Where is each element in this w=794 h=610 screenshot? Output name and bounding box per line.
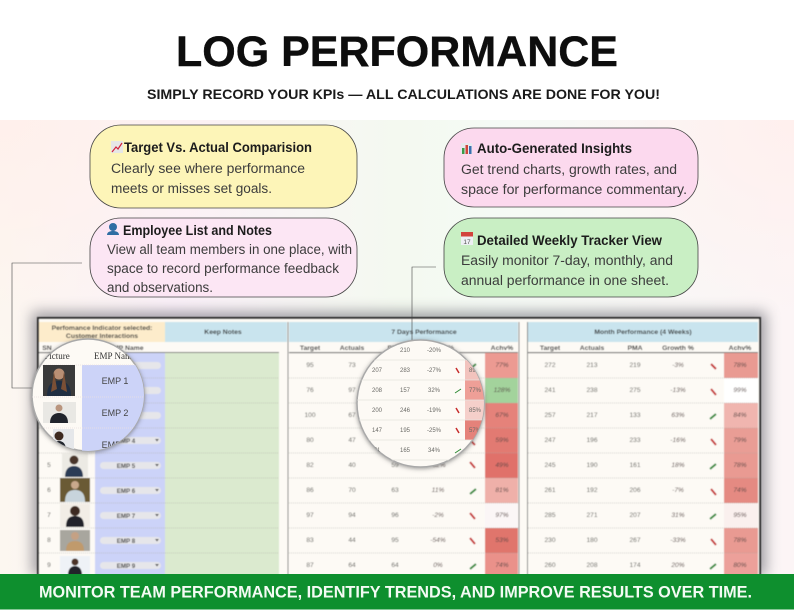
- employee and notes columns: [95, 353, 279, 575]
- card text: Get trend charts, growth rates, and: [461, 162, 677, 177]
- seven day table values: 80: [306, 437, 314, 444]
- month table values: 79%: [733, 437, 747, 444]
- employee rows: 6: [47, 487, 51, 494]
- month table values: 84%: [733, 412, 747, 419]
- employee rows: 7: [47, 512, 51, 519]
- magnifier: growth values: 165: [400, 448, 411, 454]
- seven day table values: 97: [306, 512, 314, 519]
- seven day table values: 95: [391, 537, 399, 544]
- magnifier: growth values: [356, 340, 486, 467]
- month table values: 208: [586, 562, 598, 569]
- card text: space for performance commentary.: [461, 182, 687, 197]
- month table values: 95%: [733, 512, 747, 519]
- card heading: Target Vs. Actual Comparision: [124, 140, 312, 155]
- month table values: 261: [544, 487, 556, 494]
- seven day table values: 44: [348, 537, 356, 544]
- column headers: [39, 345, 758, 353]
- header: picture: Picture: [44, 351, 70, 361]
- seven day table values: 70: [348, 487, 356, 494]
- magnifier: growth values: 147: [372, 428, 383, 434]
- month table values: 207: [629, 512, 641, 519]
- seven day table values: 59%: [495, 437, 509, 444]
- card text: and observations.: [107, 280, 213, 295]
- month table values: 238: [586, 387, 598, 394]
- magnifier: growth values: -27%: [427, 368, 442, 374]
- row separators: [39, 378, 758, 553]
- title: LOG PERFORMANCE: [176, 28, 618, 76]
- month table values: -33%: [670, 537, 686, 544]
- month table values: [544, 362, 747, 569]
- seven day table values: 0%: [433, 562, 443, 569]
- column headers: Target: [540, 345, 561, 352]
- header bands: Customer Interactions: [66, 333, 138, 340]
- seven day table values: 82: [306, 462, 314, 469]
- card text: [461, 253, 673, 288]
- month table values: 180: [586, 537, 598, 544]
- magnifier: growth values: 207: [372, 368, 383, 374]
- month table values: 257: [544, 412, 556, 419]
- section dividers: [288, 322, 528, 575]
- column headers: Achv%: [491, 345, 513, 352]
- month table values: 272: [544, 362, 556, 369]
- column headers: Achv%: [729, 345, 751, 352]
- magnifier: growth values: -20%: [427, 348, 442, 354]
- seven day table values: -54%: [430, 537, 446, 544]
- seven day table values: -2%: [432, 512, 444, 519]
- month table values: 245: [544, 462, 556, 469]
- seven day table values: 96: [391, 512, 399, 519]
- month table values: 31%: [671, 512, 685, 519]
- magnifier: growth values: 32%: [428, 388, 441, 394]
- magnifier: growth values: 85%: [469, 408, 482, 414]
- seven day table values: 11%: [432, 487, 444, 494]
- seven day table values: [304, 362, 511, 569]
- magnifier: growth values: 195: [400, 428, 411, 434]
- sheet shadow: [32, 312, 766, 576]
- icon: person: [107, 223, 119, 235]
- month table values: 174: [629, 562, 641, 569]
- header bands: Keep Notes: [204, 329, 242, 336]
- header: employee name: EMP Name: [94, 351, 136, 361]
- seven day table values: 95: [306, 362, 314, 369]
- month table values: 230: [544, 537, 556, 544]
- month table values: 275: [629, 387, 641, 394]
- month table values: 78%: [733, 462, 747, 469]
- seven day table values: 64: [391, 562, 399, 569]
- magnifier: growth values: -19%: [427, 408, 442, 414]
- month table values: 285: [544, 512, 556, 519]
- seven day table values: 76: [306, 387, 314, 394]
- month table values: 241: [544, 387, 556, 394]
- magnifier: growth values: 89%: [469, 368, 482, 374]
- employee photos: [60, 453, 90, 575]
- header bands: Perfomance Indicator selected:: [52, 325, 152, 332]
- month table values: 161: [629, 462, 641, 469]
- month table values: 196: [586, 437, 598, 444]
- seven day table values: 63: [391, 487, 399, 494]
- header bands: [39, 322, 758, 342]
- seven day table values: 100: [304, 412, 316, 419]
- month table values: 63%: [671, 412, 685, 419]
- footer banner: [0, 574, 794, 610]
- card: target vs actual: [90, 125, 357, 208]
- card text: annual performance in one sheet.: [461, 273, 669, 288]
- employee rows: EMP 7: [117, 513, 136, 520]
- card heading: Employee List and Notes: [123, 223, 272, 238]
- magnifier: employee photos: [32, 339, 144, 455]
- magnifier: growth values: 57%: [469, 428, 482, 434]
- card: weekly tracker: [444, 218, 698, 297]
- seven day table values: 87: [306, 562, 314, 569]
- month table values: 74%: [733, 487, 747, 494]
- month table values: 233: [629, 437, 641, 444]
- seven day table values: 128%: [494, 387, 511, 394]
- month table values: 99%: [733, 387, 747, 394]
- magnifier: growth values: 200: [372, 408, 383, 414]
- column headers: Actuals: [340, 345, 364, 352]
- card text: meets or misses set goals.: [111, 181, 272, 196]
- column headers: Target: [300, 345, 321, 352]
- month table values: 247: [544, 437, 556, 444]
- month table values: 78%: [733, 362, 747, 369]
- photo 1: [43, 365, 75, 396]
- column headers: PMA: [387, 345, 403, 352]
- month table values: 260: [544, 562, 556, 569]
- connector: weekly tracker to table: [412, 267, 436, 342]
- month table values: 78%: [733, 537, 747, 544]
- month table values: 20%: [670, 562, 685, 569]
- seven day table values: 77%: [495, 362, 509, 369]
- header bands: 7 Days Performance: [391, 329, 457, 336]
- month table values: 133: [629, 412, 641, 419]
- magnifier: growth values: 71: [374, 448, 381, 454]
- seven day table values: 59: [391, 462, 399, 469]
- header bands: Month Performance (4 Weeks): [594, 329, 692, 336]
- column headers: EMP Name: [108, 345, 144, 352]
- seven day table values: 97%: [495, 512, 509, 519]
- column headers: Growth %: [662, 345, 694, 352]
- card: auto-generated insights: [444, 128, 698, 207]
- performance tracker sheet: [38, 318, 760, 578]
- employee rows: EMP 8: [117, 538, 136, 545]
- month table values: 219: [629, 362, 641, 369]
- icon: trend chart: [111, 141, 123, 153]
- icon: calendar: 17: [463, 239, 471, 246]
- month table values: 217: [586, 412, 598, 419]
- card text: [107, 242, 352, 295]
- magnifier: growth values: 157: [400, 388, 411, 394]
- seven day table values: 67%: [495, 412, 509, 419]
- magnifier: growth values: -25%: [427, 428, 442, 434]
- card text: View all team members in one place, with: [107, 242, 352, 257]
- month table values: 192: [586, 487, 598, 494]
- employee rows: EMP 6: [117, 488, 136, 495]
- magnifier: growth values: 34%: [428, 448, 441, 454]
- column headers: PMA: [627, 345, 643, 352]
- seven day table values: 94: [348, 512, 356, 519]
- column headers: Actuals: [580, 345, 604, 352]
- card text: [461, 162, 687, 197]
- name: EMP 1: EMP 1: [102, 376, 128, 386]
- card text: Easily monitor 7-day, monthly, and: [461, 253, 673, 268]
- name: EMP 2: EMP 2: [102, 408, 128, 418]
- card heading: Auto-Generated Insights: [477, 141, 632, 156]
- card text: space to record performance feedback: [107, 261, 339, 276]
- month table values: -13%: [670, 387, 686, 394]
- icon: bar chart: [461, 143, 472, 154]
- magnifier: growth values: 246: [400, 408, 411, 414]
- photo 2: [43, 402, 76, 423]
- seven day table values: 53%: [495, 537, 509, 544]
- employee rows: 8: [47, 537, 51, 544]
- employee rows: EMP 9: [117, 563, 136, 570]
- card heading: Detailed Weekly Tracker View: [477, 233, 662, 248]
- month table values: -7%: [672, 487, 684, 494]
- employee rows: [47, 362, 161, 570]
- seven day table values: 64: [348, 562, 356, 569]
- card: employee list: [90, 218, 357, 297]
- card text: [111, 161, 305, 196]
- seven day table values: 73: [348, 362, 356, 369]
- month table values: 271: [586, 512, 598, 519]
- month table values: 18%: [671, 462, 685, 469]
- month table values: 206: [629, 487, 641, 494]
- seven day table values: 86: [306, 487, 314, 494]
- name: EMP 3 partial: EMP 3: [102, 440, 128, 450]
- magnifier: growth values: 208: [372, 388, 383, 394]
- magnifier: growth values: 283: [400, 368, 411, 374]
- column headers: SN: [42, 345, 52, 352]
- seven day table values: 40: [348, 462, 356, 469]
- seven day table values: 83: [306, 537, 314, 544]
- month table values: -3%: [672, 362, 684, 369]
- column headers: Growth %: [422, 345, 454, 352]
- footer text: MONITOR TEAM PERFORMANCE, IDENTIFY TRENDS, AND IMPROVE RESULTS OVER TIME.: [39, 582, 752, 602]
- achievement heat cells: [485, 353, 758, 575]
- subtitle: SIMPLY RECORD YOUR KPIs — ALL CALCULATIONS ARE DONE FOR YOU!: [147, 86, 660, 102]
- seven day table values: 67: [348, 412, 356, 419]
- month table values: 213: [586, 362, 598, 369]
- seven day table values: 47: [348, 437, 356, 444]
- month table values: 80%: [733, 562, 747, 569]
- card text: Clearly see where performance: [111, 161, 305, 176]
- month table values: 190: [586, 462, 598, 469]
- seven day table values: 97: [348, 387, 356, 394]
- seven day table values: 74%: [495, 562, 509, 569]
- seven day table values: 81%: [495, 487, 509, 494]
- seven day table values: 49%: [495, 462, 509, 469]
- employee rows: EMP 5: [117, 463, 136, 470]
- icon: calendar: [461, 232, 473, 246]
- seven day table values: -32%: [430, 462, 446, 469]
- employee rows: 5: [47, 462, 51, 469]
- photo 3: [52, 429, 74, 450]
- employee rows: 9: [47, 562, 51, 569]
- connector: employee list to photos: [12, 263, 82, 388]
- magnifier: growth values: 77%: [469, 388, 482, 394]
- month table values: 267: [629, 537, 641, 544]
- magnifier: growth values: 210: [400, 348, 411, 354]
- month table values: -16%: [670, 437, 686, 444]
- employee rows: EMP 4: [117, 438, 136, 445]
